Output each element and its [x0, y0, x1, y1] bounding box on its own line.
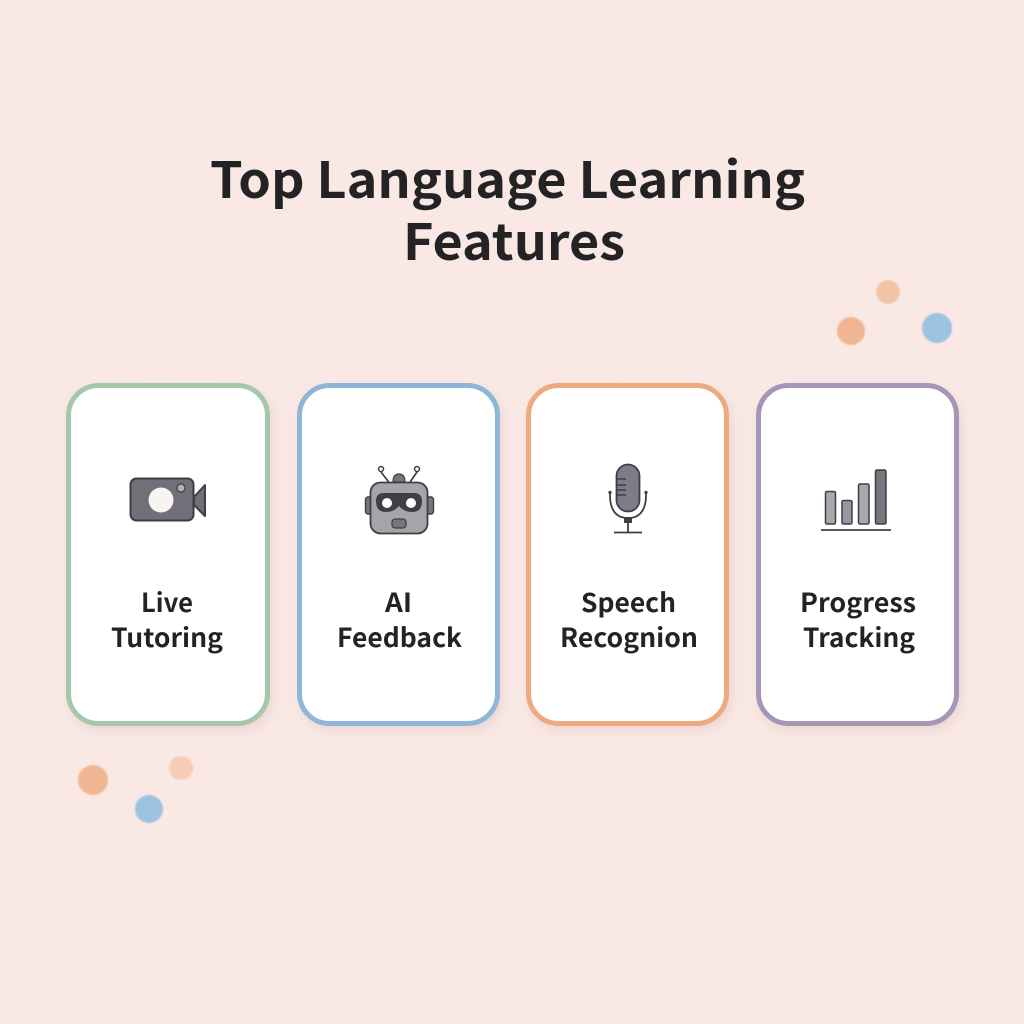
label: live tutoring: Tutoring — [111, 618, 223, 655]
label: AI feedback: AI — [384, 583, 412, 620]
decorative dots: top right — [837, 280, 952, 345]
icon: microphone — [608, 464, 648, 532]
icon: bar chart — [821, 470, 891, 530]
decorative dots: bottom left — [78, 756, 193, 823]
label: live tutoring: Live — [141, 583, 193, 620]
title: Features — [403, 203, 625, 275]
label: progress tracking: Tracking — [803, 618, 915, 655]
panel: speech recognition — [528, 386, 726, 724]
label: progress tracking — [800, 583, 916, 655]
label: speech recognition — [560, 583, 698, 655]
label: speech recognition: Recognion — [560, 618, 698, 655]
label: speech recognition: Speech — [581, 583, 676, 620]
title: Top Language Learning — [210, 141, 805, 213]
label: AI feedback — [337, 583, 462, 655]
panel: progress tracking — [758, 386, 956, 724]
panel: AI feedback — [300, 386, 498, 724]
label: AI feedback: Feedback — [337, 618, 462, 655]
label: progress tracking: Progress — [800, 583, 916, 620]
icon: video camera — [130, 478, 205, 520]
panel: live tutoring — [68, 386, 268, 724]
icon: robot — [366, 466, 434, 534]
label: live tutoring — [111, 583, 223, 655]
title — [210, 141, 805, 275]
